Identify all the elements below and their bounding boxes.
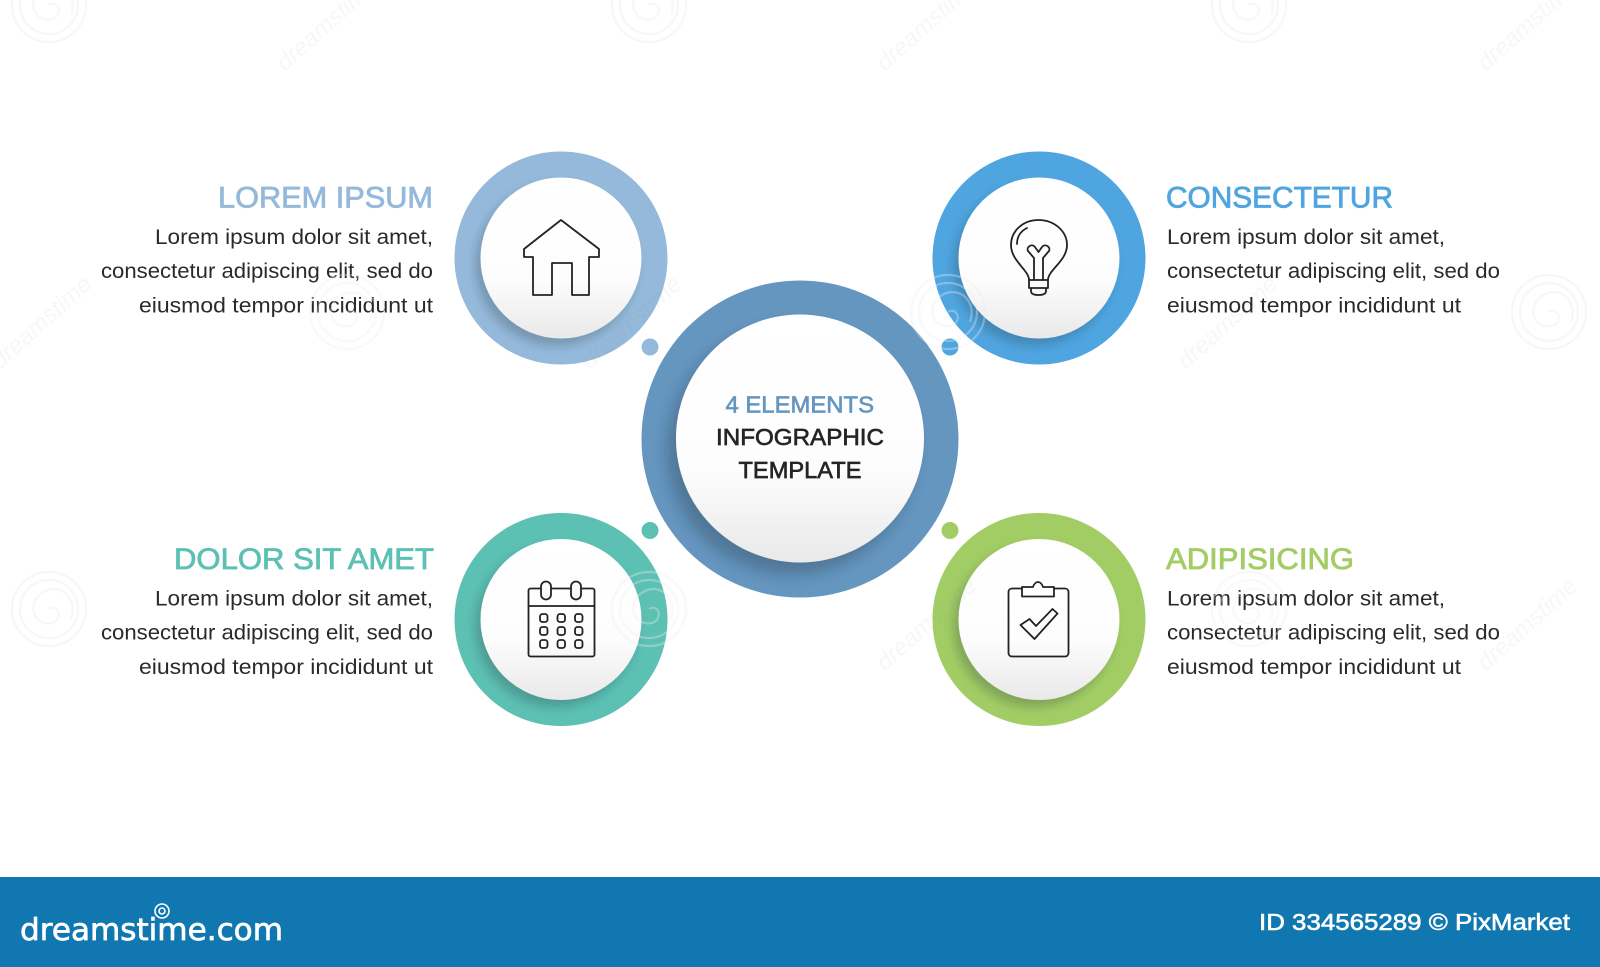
ring: centre	[642, 280, 958, 598]
disc: lorem ipsum	[480, 178, 642, 338]
footer banner	[0, 877, 1600, 967]
panel: adipisicing circle	[932, 513, 1146, 726]
icon: logo spiral	[155, 904, 169, 918]
text block: consectetur: CONSECTETUR	[1166, 182, 1393, 214]
text block: dolor sit amet: Lorem ipsum dolor sit amet,	[155, 586, 433, 610]
text block: lorem ipsum: LOREM IPSUM	[218, 182, 433, 214]
watermark pattern: dreamstime	[871, 573, 982, 676]
text block: dolor sit amet: DOLOR SIT AMET	[174, 543, 434, 576]
text block: lorem ipsum: eiusmod tempor incididunt ut	[139, 294, 433, 318]
text block: dolor sit amet: eiusmod tempor incididunt ut	[139, 655, 433, 679]
panel: consectetur circle	[932, 152, 1146, 364]
disc: centre	[676, 314, 924, 562]
image id and credit: ID 334565289 © PixMarket	[1259, 909, 1571, 935]
text block: adipisicing: Lorem ipsum dolor sit amet,	[1167, 586, 1445, 610]
text block: adipisicing: eiusmod tempor incididunt ut	[1167, 655, 1461, 679]
text block: consectetur: eiusmod tempor incididunt ut	[1167, 294, 1461, 318]
icon: clipboard with check	[1008, 582, 1068, 656]
text block: dolor sit amet: consectetur adipiscing elit, sed do	[101, 620, 433, 644]
text block: adipisicing: consectetur adipiscing elit, sed do	[1167, 620, 1500, 644]
text block: consectetur: Lorem ipsum dolor sit amet,	[1167, 225, 1445, 249]
icon: calendar	[528, 582, 594, 656]
centre title	[716, 392, 884, 483]
text block: dolor sit amet	[101, 543, 434, 679]
ring: consectetur	[932, 152, 1146, 364]
watermark pattern	[0, 0, 1586, 676]
logo: dreamstime wordmark: dreamstime.com	[20, 913, 283, 948]
text block: lorem ipsum	[101, 182, 433, 318]
centre title: INFOGRAPHIC	[716, 424, 884, 450]
dot: dolor sit amet	[642, 522, 658, 539]
text block: lorem ipsum: Lorem ipsum dolor sit amet,	[155, 225, 433, 249]
dot: adipisicing	[942, 522, 958, 539]
watermark pattern: dreamstime	[1472, 573, 1583, 676]
icon: house	[524, 220, 599, 295]
text block: adipisicing	[1166, 543, 1500, 679]
ring: dolor sit amet	[454, 513, 668, 726]
text block: lorem ipsum: consectetur adipiscing elit, sed do	[101, 259, 433, 283]
text block: consectetur	[1166, 182, 1500, 318]
disc: dolor sit amet	[480, 539, 642, 700]
dot: consectetur	[942, 338, 958, 356]
text block: adipisicing: ADIPISICING	[1166, 543, 1354, 576]
watermark pattern: dreamstime	[576, 271, 687, 374]
centre title: 4 ELEMENTS	[726, 392, 874, 418]
icon: light bulb	[1011, 220, 1067, 295]
centre title: TEMPLATE	[738, 457, 862, 483]
panel: central circle	[642, 280, 958, 598]
panel: dolor sit amet circle	[454, 513, 668, 726]
disc: consectetur	[958, 178, 1120, 338]
dot: lorem ipsum	[642, 338, 658, 356]
text block: consectetur: consectetur adipiscing elit, sed do	[1167, 259, 1500, 283]
ring: adipisicing	[932, 513, 1146, 726]
disc: adipisicing	[958, 539, 1120, 700]
panel: lorem ipsum circle	[454, 152, 668, 364]
ring: lorem ipsum	[454, 152, 668, 364]
watermark pattern: dreamstime	[1172, 271, 1283, 374]
